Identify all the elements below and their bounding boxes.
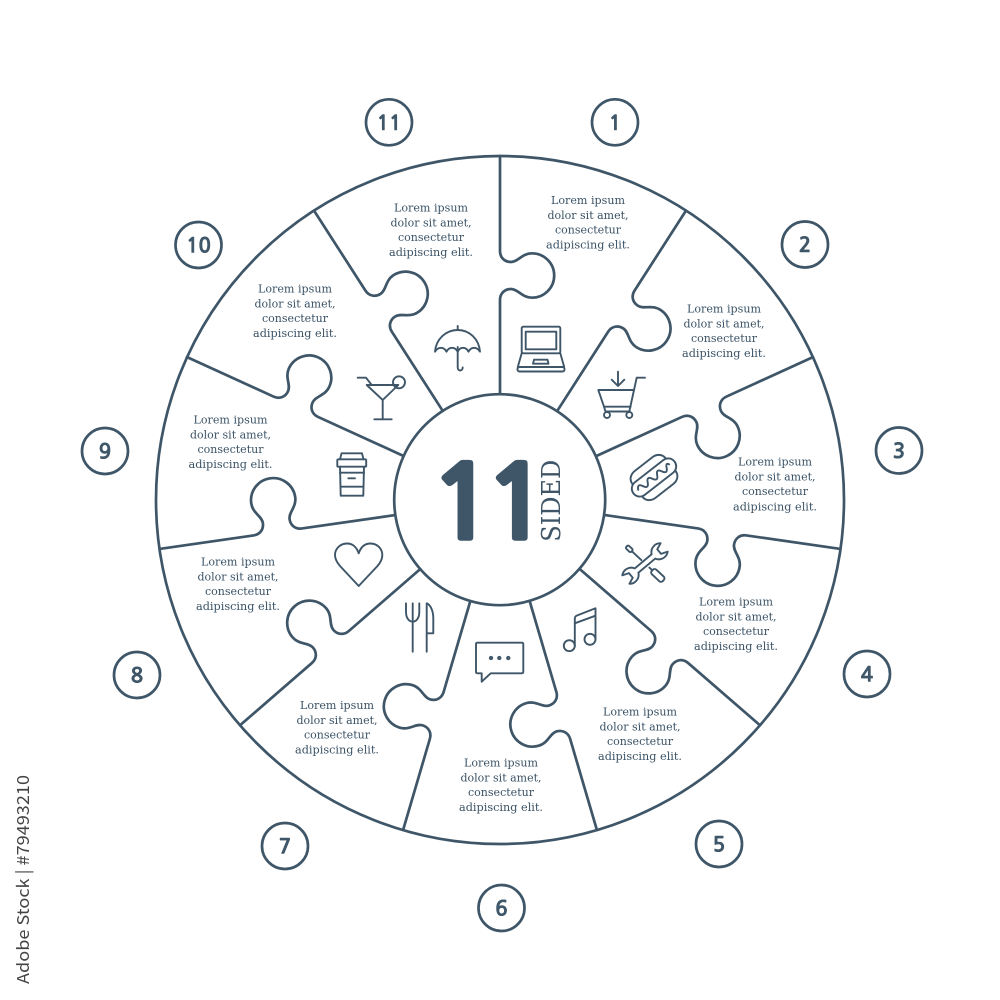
text: panel 7: adipiscing elit. — [295, 744, 379, 756]
badge 7 — [262, 823, 308, 869]
text: panel 9: dolor sit amet, — [190, 428, 271, 441]
text: panel 5: dolor sit amet, — [600, 720, 680, 733]
text: panel 4 — [694, 596, 778, 653]
icon: hot dog — [623, 448, 685, 507]
text: panel 6 — [459, 756, 543, 814]
text: panel 4: consectetur — [703, 625, 770, 638]
text: panel 11: Lorem ipsum — [394, 202, 468, 214]
badge 1 — [592, 99, 638, 145]
badge 11: 11 — [377, 114, 401, 134]
spoke 2 with puzzle tab — [557, 211, 732, 440]
stock credit: Adobe Stock | #79493210 — [10, 775, 34, 984]
text: panel 8: adipiscing elit. — [196, 600, 280, 613]
text: panel 10: Lorem ipsum — [258, 282, 332, 296]
text: panel 3: dolor sit amet, — [734, 471, 816, 484]
badge 3: 3 — [893, 442, 905, 462]
badge 1: 1 — [609, 114, 621, 134]
icons — [335, 326, 685, 682]
text: panel 9: consectetur — [198, 443, 264, 456]
text: panel 5 — [598, 705, 682, 763]
spoke 8 with puzzle tab — [205, 528, 420, 725]
spoke 11 with puzzle tab — [314, 181, 488, 411]
text: panel 9: adipiscing elit. — [188, 458, 272, 471]
text: panel 8: dolor sit amet, — [198, 570, 278, 583]
text: panel 7: consectetur — [304, 728, 371, 742]
text: panel 2 — [682, 302, 766, 360]
icon: laptop — [518, 327, 564, 372]
text: panel 4: Lorem ipsum — [699, 596, 773, 609]
text: panel 2: consectetur — [691, 332, 758, 345]
text: panel 8 — [196, 555, 280, 613]
text: panel 3: consectetur — [742, 485, 809, 498]
spoke 7 with puzzle tab — [351, 586, 470, 830]
text: panel 3: Lorem ipsum — [738, 456, 812, 469]
text: panel 10: consectetur — [262, 312, 329, 325]
text: panel 4: adipiscing elit. — [694, 640, 778, 653]
icon: heart — [335, 544, 382, 586]
text: panel 2: adipiscing elit. — [682, 347, 766, 360]
text: panel 6: adipiscing elit. — [459, 801, 543, 814]
text: panel 7: dolor sit amet, — [296, 714, 378, 727]
text: panel 4: dolor sit amet, — [696, 611, 776, 624]
puzzle wheel — [152, 156, 844, 845]
text: panel 6: consectetur — [468, 786, 535, 799]
text: panel 3: adipiscing elit. — [733, 501, 817, 514]
text blocks — [188, 194, 817, 814]
text: panel 11 — [389, 202, 473, 259]
badge 6 — [478, 885, 524, 931]
text: panel 7 — [295, 699, 379, 756]
text: panel 10: dolor sit amet, — [254, 298, 336, 310]
icon: music note — [564, 608, 596, 651]
icon: fork and knife — [406, 603, 433, 652]
inner circle — [394, 394, 605, 605]
text: panel 2: Lorem ipsum — [687, 302, 761, 316]
icon: cocktail glass — [358, 376, 405, 419]
text: panel 11: consectetur — [398, 231, 465, 244]
text: panel 3 — [733, 456, 817, 514]
text: panel 10: adipiscing elit. — [253, 327, 337, 340]
icon: umbrella — [435, 326, 480, 370]
text: panel 11: dolor sit amet, — [390, 216, 472, 230]
outer ring — [156, 156, 844, 844]
badge 9: 9 — [99, 442, 111, 462]
text: panel 1 — [546, 194, 630, 252]
text: panel 1: adipiscing elit. — [546, 238, 630, 252]
icon: wrench and screwdriver — [621, 541, 669, 586]
spoke 10 with puzzle tab — [187, 308, 426, 456]
text: panel 1: consectetur — [555, 224, 622, 236]
badge 2 — [782, 222, 828, 268]
badge 6: 6 — [495, 900, 508, 920]
text: panel 5: Lorem ipsum — [603, 705, 677, 718]
badge 5: 5 — [713, 836, 725, 856]
text: panel 7: Lorem ipsum — [300, 699, 374, 712]
text: panel 8: consectetur — [205, 585, 272, 598]
icon: cart — [598, 372, 645, 418]
text: panel 2: dolor sit amet, — [684, 318, 764, 330]
spoke 6 with puzzle tab — [478, 602, 597, 845]
text: panel 1: Lorem ipsum — [551, 194, 625, 207]
text: panel 5: adipiscing elit. — [598, 750, 682, 763]
text: panel 6: dolor sit amet, — [460, 772, 542, 784]
number badges — [82, 99, 922, 931]
badge 8: 8 — [131, 666, 143, 686]
badge 8 — [114, 652, 160, 698]
spoke 3 with puzzle tab — [596, 357, 835, 505]
text: panel 8: Lorem ipsum — [201, 555, 275, 568]
text: panel 9: Lorem ipsum — [194, 413, 268, 426]
badge 10 — [176, 222, 222, 268]
spoke 5 with puzzle tab — [545, 569, 760, 766]
badge 5 — [696, 821, 742, 867]
badge 3 — [876, 428, 922, 474]
badge 7: 7 — [279, 838, 291, 858]
badge 4 — [844, 651, 890, 697]
badge 9 — [82, 428, 128, 474]
center title: SIDED: SIDED — [537, 460, 567, 542]
icon: coffee cup — [337, 453, 366, 496]
text: panel 1: dolor sit amet, — [548, 209, 628, 222]
icon: speech bubble — [476, 643, 523, 682]
text: panel 11: adipiscing elit. — [389, 246, 473, 259]
spoke 9 with puzzle tab — [152, 461, 395, 549]
badge 2: 2 — [799, 236, 811, 256]
text: panel 5: consectetur — [607, 735, 674, 748]
text: panel 6: Lorem ipsum — [464, 756, 538, 770]
badge 10: 10 — [186, 236, 211, 256]
badge 11 — [366, 99, 412, 145]
center title: 11: 11 — [429, 453, 551, 554]
text: panel 10 — [253, 282, 337, 340]
spoke 4 with puzzle tab — [597, 515, 840, 603]
badge 4: 4 — [861, 666, 873, 686]
text: panel 9 — [188, 413, 272, 471]
spoke 1 with puzzle tab — [500, 156, 554, 394]
